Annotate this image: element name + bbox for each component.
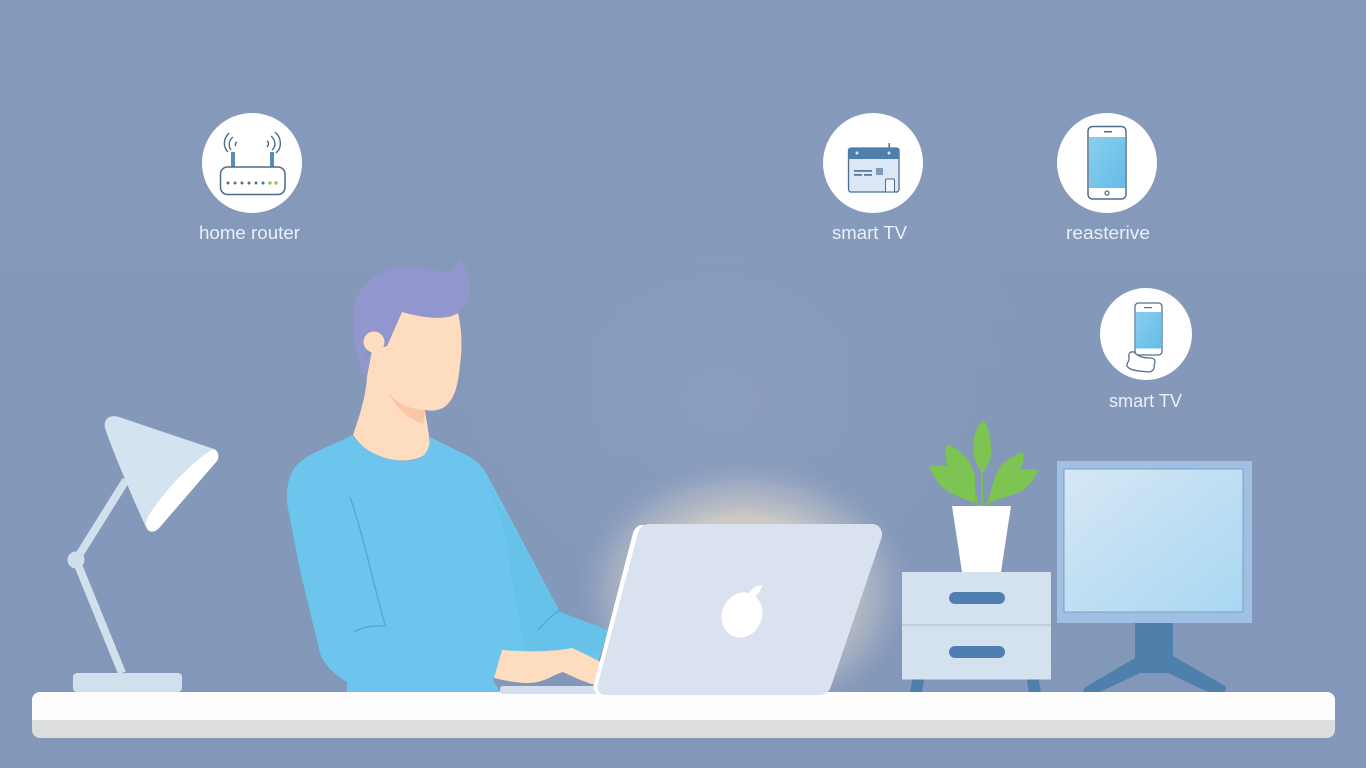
label: smart TV: smart TV <box>832 223 907 243</box>
ear <box>364 332 384 352</box>
hand <box>494 648 601 685</box>
sleeve fold <box>486 480 608 655</box>
jaw shadow <box>388 392 425 424</box>
nightstand with drawers <box>902 572 1051 692</box>
label: smart TV (lower): smart TV <box>1109 391 1182 411</box>
label: reasterive: reasterive <box>1066 223 1150 243</box>
icon: smart TV <box>823 113 923 213</box>
neck and face <box>353 312 461 460</box>
person <box>287 260 608 692</box>
background soft light <box>390 120 1050 680</box>
laptop <box>500 524 882 695</box>
sweater <box>287 435 608 692</box>
sweater creases <box>350 497 560 632</box>
laptop glow <box>573 457 917 727</box>
monitor <box>1057 461 1252 692</box>
icon: home router <box>202 113 302 213</box>
icon: phone in hand <box>1100 288 1192 380</box>
desk lamp <box>68 416 218 692</box>
label: home router: home router <box>199 223 300 243</box>
desk <box>32 692 1335 738</box>
hair <box>353 260 470 379</box>
apple logo <box>715 585 769 644</box>
potted plant <box>929 420 1038 572</box>
icon: smartphone <box>1057 113 1157 213</box>
